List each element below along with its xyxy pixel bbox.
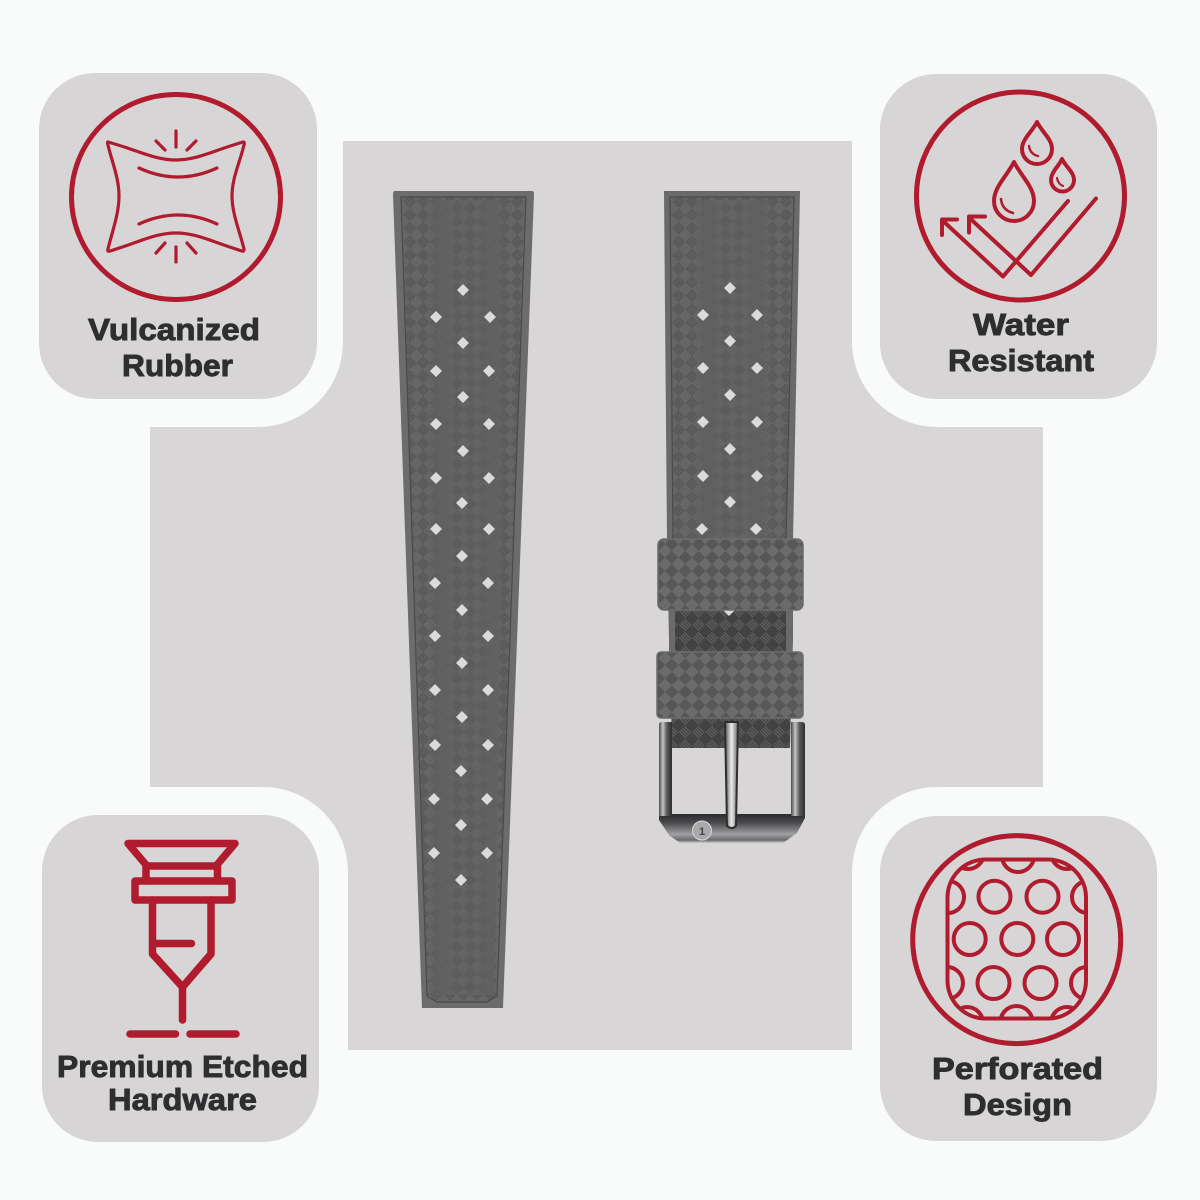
- lower keeper loop: [657, 652, 803, 718]
- card: water resistant: [880, 74, 1157, 399]
- icon: stretched rubber pillow: [72, 94, 280, 300]
- upper keeper loop: [658, 539, 803, 610]
- label: [57, 1049, 308, 1117]
- label: [88, 312, 260, 383]
- label: Resistant: [948, 343, 1094, 378]
- label: [932, 1051, 1103, 1122]
- strap centre checker band: [710, 200, 756, 538]
- halo: bottom-right: [852, 787, 1185, 1170]
- card background: [39, 73, 317, 399]
- label: Hardware: [108, 1082, 257, 1117]
- central grey backdrop panel: [150, 141, 1043, 1050]
- halo: top-left: [10, 44, 343, 427]
- halo: bottom-left: [14, 787, 348, 1170]
- label: Design: [963, 1087, 1072, 1122]
- icon: laser etcher: [128, 844, 236, 1034]
- icon: water drops and arrows: [916, 92, 1124, 300]
- label: [948, 307, 1094, 378]
- strap textured surface: [401, 197, 526, 1002]
- textured section between keepers: [675, 606, 786, 656]
- label: Vulcanized: [88, 312, 260, 347]
- card: premium etched hardware: [42, 815, 319, 1142]
- strap centre checker band: [444, 200, 490, 995]
- buckle bottom bar: [659, 814, 805, 843]
- perforation between keepers: [723, 604, 735, 616]
- label: Premium Etched: [57, 1049, 308, 1084]
- long watch strap piece: [393, 191, 534, 1008]
- icon: perforated pad: [913, 836, 1121, 1044]
- strap perforations: [428, 284, 496, 886]
- card background: [880, 74, 1157, 399]
- strap perforations: [696, 282, 763, 535]
- buckle logo: 1: [699, 826, 705, 838]
- strap textured surface: [670, 197, 794, 540]
- lower strap section: [672, 714, 790, 748]
- card: perforated design: [880, 816, 1157, 1141]
- halo: top-right: [852, 46, 1185, 427]
- strap outer edge: [393, 191, 534, 1008]
- card background: [42, 815, 319, 1142]
- buckle right bar: [791, 722, 805, 816]
- label: Rubber: [122, 348, 233, 383]
- dark strap section between keepers: [669, 606, 792, 656]
- buckle left bar: [659, 722, 672, 816]
- card: vulcanized rubber: [39, 73, 317, 399]
- strap outer edge: [664, 191, 800, 747]
- buckle logo: [692, 821, 712, 840]
- card background: [880, 816, 1157, 1141]
- label: Water: [973, 307, 1069, 342]
- label: Perforated: [932, 1051, 1103, 1086]
- short watch strap piece with buckle: [657, 191, 805, 843]
- buckle pin: [725, 722, 738, 828]
